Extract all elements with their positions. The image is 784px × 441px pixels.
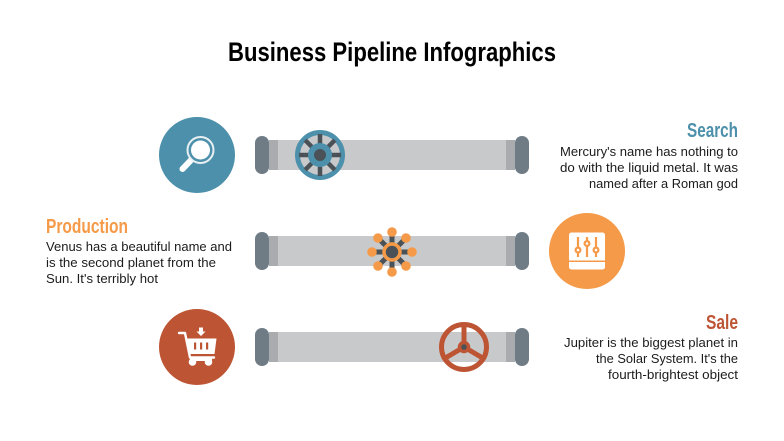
heading: sale: Sale <box>706 312 738 334</box>
text: production description: Venus has a beautiful name and <box>46 240 232 254</box>
pipe: sale <box>255 328 529 366</box>
text: search description: Mercury's name has nothing to <box>560 145 738 159</box>
text: search description: named after a Roman god <box>589 177 738 191</box>
text: production description <box>46 240 232 286</box>
pipe: search <box>255 136 529 174</box>
icon: control panel <box>549 213 625 289</box>
icon: shopping cart <box>159 309 235 385</box>
icon: magnifying glass <box>159 117 235 193</box>
panel: sale <box>159 309 739 385</box>
panel: production <box>46 213 625 289</box>
text: production description: is the second planet from the <box>46 256 216 270</box>
text: sale description: Jupiter is the biggest planet in <box>564 336 738 350</box>
heading: search: Search <box>687 120 738 142</box>
valve: production spokes <box>367 227 417 277</box>
title: Business Pipeline Infographics <box>228 37 556 67</box>
valve: sale wheel <box>442 324 486 370</box>
panel: search <box>159 117 738 193</box>
text: search description <box>560 145 738 191</box>
heading: production: Production <box>46 216 128 238</box>
pipe: production <box>255 232 529 270</box>
text: sale description: fourth-brightest object <box>608 368 739 382</box>
text: sale description: the Solar System. It's the <box>596 352 738 366</box>
valve: search wheel <box>298 132 342 178</box>
text: production description: Sun. It's terribly hot <box>46 272 159 286</box>
text: search description: do with the liquid metal. It was <box>560 161 738 175</box>
text: sale description <box>564 336 739 382</box>
